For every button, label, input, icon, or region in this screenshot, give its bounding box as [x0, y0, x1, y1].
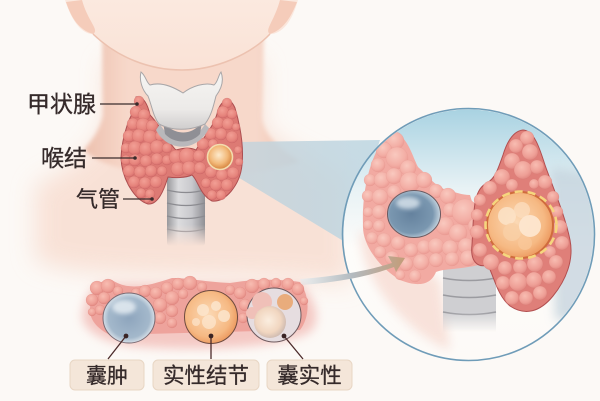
label: 囊实性 — [267, 360, 352, 390]
leader: solid — [209, 334, 213, 359]
cyst — [103, 293, 155, 343]
label: 囊肿: 囊肿 — [86, 365, 128, 388]
trachea label 气管: 气管 — [76, 187, 120, 212]
arrow to lens — [300, 256, 405, 285]
magnified lens — [340, 106, 600, 364]
label: 实性结节 — [153, 360, 259, 390]
thyroid cartilage — [140, 72, 222, 147]
trachea label 气管 — [76, 187, 154, 212]
nodule type strip — [82, 276, 316, 359]
blue projection beam — [236, 140, 380, 242]
thyroid nodule — [208, 144, 232, 170]
solid nodule — [184, 290, 238, 344]
illustration: head and neck — [35, 0, 350, 285]
label: 实性结节: 实性结节 — [163, 364, 249, 388]
magnified cyst — [388, 190, 440, 238]
larynx label 喉结 — [41, 145, 137, 171]
trachea — [167, 176, 205, 246]
leader: mixed — [282, 334, 303, 359]
magnified solid nodule with dashed outline — [486, 192, 556, 258]
thyroid gland — [121, 96, 243, 204]
magnified left lobe — [362, 132, 490, 284]
larynx label 喉结: 喉结 — [41, 145, 87, 171]
magnified right lobe — [470, 130, 571, 311]
mixed nodule — [246, 288, 301, 342]
label: 囊实性: 囊实性 — [277, 364, 342, 388]
thyroid label 甲状腺 — [27, 91, 139, 117]
leader: cyst — [108, 334, 128, 359]
trachea in lens — [443, 262, 496, 332]
thyroid label 甲状腺: 甲状腺 — [27, 91, 96, 117]
label: 囊肿 — [70, 360, 144, 390]
